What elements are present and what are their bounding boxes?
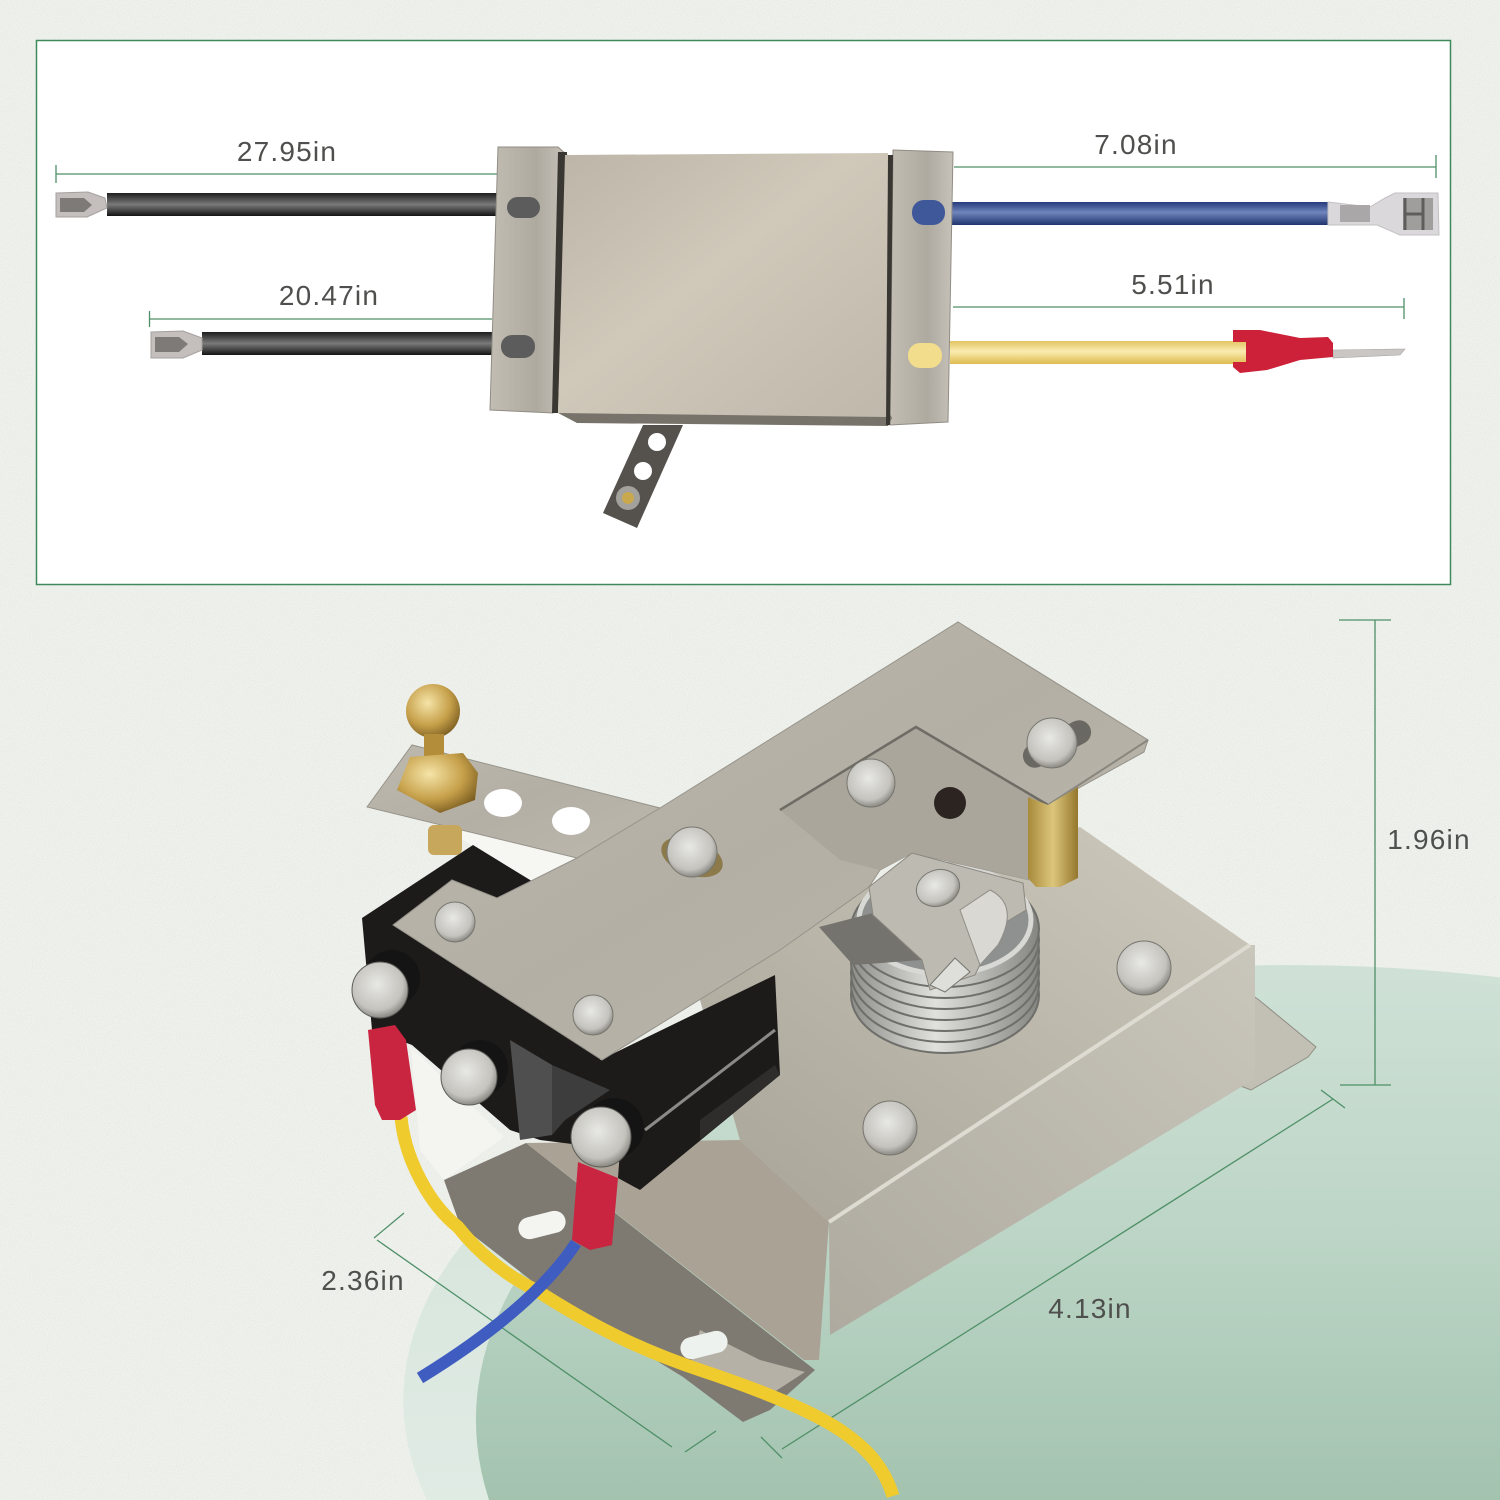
wire: long black with terminal: [56, 192, 502, 217]
green background shape: [403, 965, 1500, 1500]
dimension: 1.96in: [1339, 620, 1471, 1085]
microswitch body: [362, 845, 780, 1190]
dimension: 4.13in: [761, 1090, 1345, 1458]
relay right bracket: [890, 150, 953, 425]
dimension: 1.96in: 1.96in: [1387, 824, 1471, 855]
wire: blue with terminal: [950, 193, 1439, 235]
red terminals: [368, 1025, 618, 1250]
gap behind arm: [440, 826, 577, 885]
dimension: 20.47in: 20.47in: [279, 280, 379, 311]
adjuster arm below relay: [603, 425, 683, 528]
panel: top wiring diagram: [36, 40, 1450, 584]
wire: short black with terminal: [151, 331, 498, 358]
dimension: 27.95in: 27.95in: [237, 136, 337, 167]
gap behind switch: [411, 1047, 504, 1180]
inner channel wall: [526, 1140, 829, 1360]
relay main housing: [552, 152, 893, 426]
yellow wire: [401, 1117, 893, 1496]
dimension: 2.36in: 2.36in: [321, 1265, 405, 1296]
flange slot: [516, 1209, 568, 1241]
brass standoff: [1028, 787, 1078, 887]
flange slot: [678, 1329, 730, 1361]
dimension: 4.13in: 4.13in: [1048, 1293, 1132, 1324]
main lever plate: [393, 622, 1148, 1060]
base side wall: [829, 945, 1255, 1335]
wire: yellow with red terminal: [950, 330, 1405, 373]
brass ball stud: [397, 684, 478, 855]
mounting foot: [1238, 990, 1316, 1090]
dimension: 5.51in: 5.51in: [1131, 269, 1215, 300]
relay left bracket: [490, 147, 567, 413]
flange highlight: [690, 1330, 805, 1398]
mounting hole: [934, 787, 966, 819]
dimension: 20.47in: [150, 280, 492, 327]
lever arm with holes: [367, 745, 660, 858]
dimension: 7.08in: 7.08in: [1094, 129, 1178, 160]
dimension: 2.36in: [321, 1213, 716, 1452]
photo: thermostat switch assembly: [352, 622, 1316, 1496]
channel bottom flange: [444, 1143, 815, 1422]
adjustment slot: [1019, 716, 1095, 772]
dimension: 27.95in: [56, 136, 498, 183]
lever slot with brass: [656, 829, 728, 885]
spring arm plate: [819, 853, 1026, 992]
screws: [352, 718, 1171, 1167]
dimension: 5.51in: [953, 269, 1404, 319]
spring coil: [851, 866, 1039, 1053]
blue wire: [420, 1243, 576, 1378]
wall fold highlight: [829, 945, 1250, 1222]
base top face: [700, 827, 1250, 1222]
dimension: 7.08in: [954, 129, 1436, 178]
